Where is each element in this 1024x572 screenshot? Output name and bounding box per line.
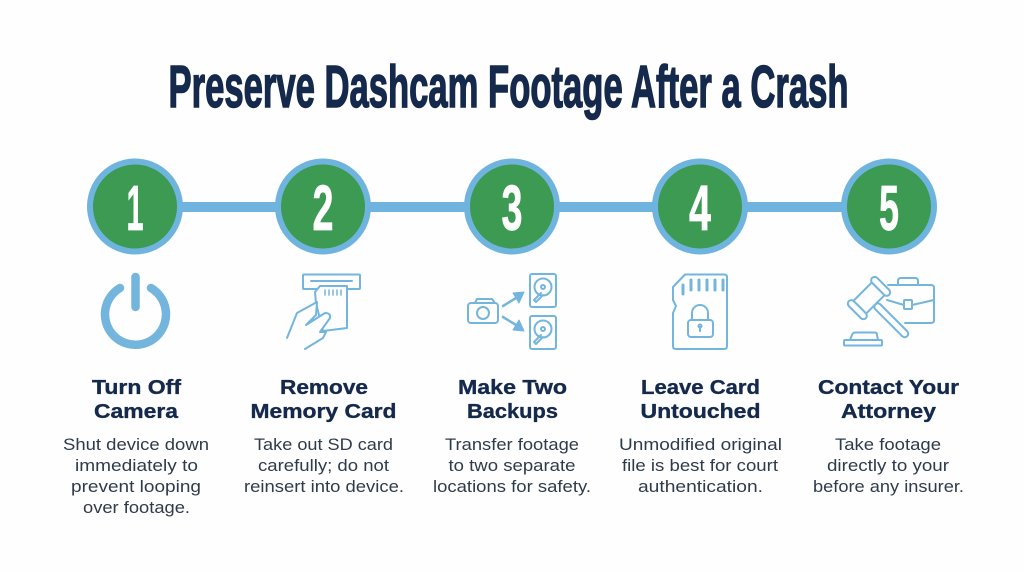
timeline connector <box>135 202 889 212</box>
icon: hand removing memory card <box>287 274 360 349</box>
text block: step 2: Memory Card <box>250 400 396 423</box>
arrows <box>503 292 524 331</box>
step 4 badge: 4 <box>689 172 711 244</box>
text block: step 1: Shut device down <box>63 436 209 454</box>
text block: step 3: Transfer footage <box>445 436 579 454</box>
text block: step 2 <box>244 376 404 496</box>
text block: step 3: to two separate <box>448 457 576 475</box>
text block: step 3: Backups <box>467 400 558 423</box>
text block: step 4: authentication. <box>638 478 763 496</box>
text block: step 2: Remove <box>280 376 368 399</box>
step 2 badge <box>278 162 368 252</box>
hard drive top <box>530 274 556 307</box>
text block: step 1: immediately to <box>75 457 198 475</box>
text block: step 4: file is best for court <box>622 457 778 475</box>
text block: step 1: Turn Off <box>92 376 181 399</box>
step 3 badge <box>467 162 557 252</box>
step 4 badge <box>655 162 745 252</box>
text block: step 5: Take footage <box>835 436 941 454</box>
step 5 badge: 5 <box>879 172 899 244</box>
text block: step 5: Contact Your <box>818 376 959 399</box>
text block: step 5: before any insurer. <box>813 478 964 496</box>
text block: step 1 <box>63 376 209 517</box>
briefcase <box>887 278 934 323</box>
text block: step 2: Take out SD card <box>254 436 393 454</box>
icon: power button <box>105 277 166 345</box>
text block: step 1: over footage. <box>83 499 190 517</box>
step 2 badge: 2 <box>312 172 334 244</box>
text block: step 1: Camera <box>94 400 179 423</box>
step 5 badge <box>844 162 934 252</box>
text block: step 5: directly to your <box>827 457 950 475</box>
step 1 badge <box>90 162 180 252</box>
text block: step 2: reinsert into device. <box>244 478 404 496</box>
hard drive bottom <box>530 316 556 349</box>
text block: step 5: Attorney <box>841 400 937 423</box>
text block: step 4: Untouched <box>640 400 760 423</box>
step 1 badge: 1 <box>126 172 144 244</box>
text block: step 1: prevent looping <box>71 478 201 496</box>
text block: step 4 <box>619 376 782 496</box>
step 3 badge: 3 <box>502 172 522 244</box>
text block: step 3: Make Two <box>458 376 567 399</box>
text block: step 4: Unmodified original <box>619 436 782 454</box>
icon: camera copied to two drives <box>468 274 556 349</box>
gavel <box>846 275 921 350</box>
text block: step 3 <box>433 376 591 496</box>
text block: step 3: locations for safety. <box>433 478 591 496</box>
text block: step 2: carefully; do not <box>258 457 389 475</box>
icon: locked SD card <box>673 274 727 349</box>
icon: gavel and briefcase <box>844 275 934 350</box>
sound block <box>844 332 882 346</box>
text block: step 5 <box>813 376 964 496</box>
camera <box>468 299 498 323</box>
text block: step 4: Leave Card <box>641 376 760 399</box>
